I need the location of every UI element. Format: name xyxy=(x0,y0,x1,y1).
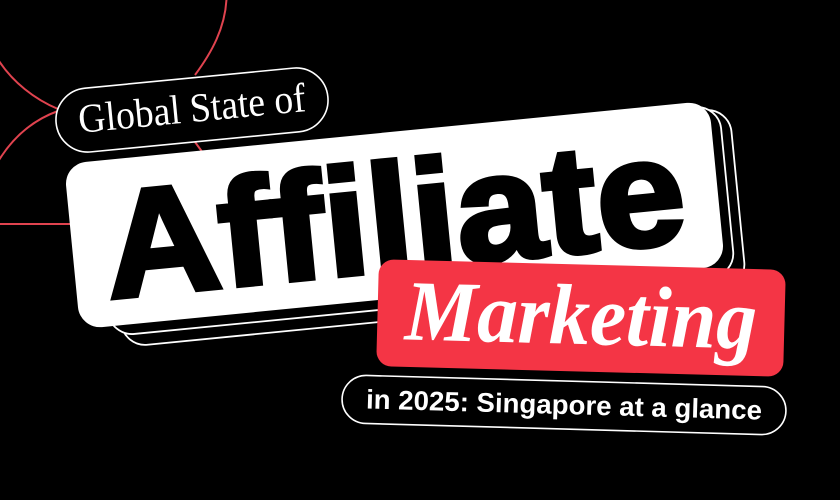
red card with Marketing heading: Marketing xyxy=(402,262,758,368)
white card with Affiliate heading: Affiliate xyxy=(96,105,692,331)
pill: in 2025: Singapore at a glance: in 2025: Singapore at a glance xyxy=(366,384,762,426)
red background curves xyxy=(0,0,226,224)
stacked outline cards xyxy=(94,105,747,347)
pill: in 2025: Singapore at a glance xyxy=(341,375,787,435)
pill: Global State of: Global State of xyxy=(76,74,308,142)
